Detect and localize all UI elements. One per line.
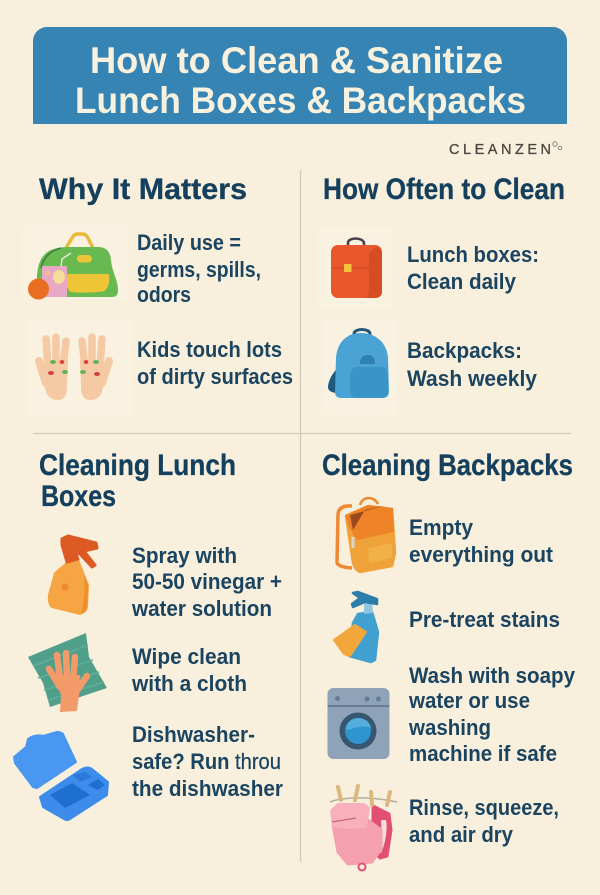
icon: washing machine (328, 688, 390, 759)
icon: blue spray and orange cloth (334, 592, 378, 662)
panel: how often to clean (318, 173, 565, 414)
text: pre-treat: Pre-treat stains (409, 607, 560, 632)
text: backpacks weekly: Wash weekly (407, 366, 538, 391)
text: kids touch (137, 337, 293, 389)
heading: cleaning lunch boxes: Boxes (41, 480, 116, 513)
text: dishwasher: safe? Run throu (132, 749, 281, 774)
title text: How to Clean & Sanitize (90, 40, 503, 81)
heading: how often: How Often to Clean (323, 173, 565, 206)
text: rinse (409, 795, 559, 847)
icon: green lunch bag with juice and orange (22, 226, 128, 300)
brand logo: CLEANZEN (449, 142, 551, 158)
text: wash: water or use (408, 688, 530, 713)
text: rinse: and air dry (409, 822, 514, 847)
text: empty (409, 515, 554, 567)
text: dishwasher: Dishwasher- (132, 722, 255, 747)
text: dishwasher (132, 722, 283, 801)
panel: cleaning lunch boxes (14, 449, 283, 820)
text: backpacks weekly (407, 338, 538, 391)
text: daily use: Daily use = (137, 230, 241, 255)
text: empty: Empty (409, 515, 474, 540)
text: rinse: Rinse, squeeze, (409, 795, 559, 820)
heading: why it matters: Why It Matters (39, 173, 247, 206)
text: daily use: germs, spills, (137, 257, 261, 282)
text: backpacks weekly: Backpacks: (407, 338, 522, 363)
icon: orange open backpack (337, 498, 395, 572)
text: daily use (137, 230, 261, 307)
text: lunch boxes daily: Lunch boxes: (407, 242, 539, 267)
text: wipe (131, 644, 247, 696)
text: empty: everything out (409, 542, 554, 567)
text: kids touch: Kids touch lots (137, 337, 282, 362)
panel: cleaning backpacks (322, 449, 576, 870)
icon: pink backpack drying on line (330, 786, 397, 870)
text: spray (131, 543, 282, 621)
text: lunch boxes daily (407, 242, 539, 294)
text: spray: water solution (131, 596, 272, 621)
text: daily use: odors (137, 282, 191, 307)
panel: why it matters (22, 173, 293, 418)
icon: dirty hands (28, 322, 132, 418)
text: dishwasher: the dishwasher (132, 776, 283, 801)
text: wash (408, 663, 576, 766)
title text (75, 40, 526, 121)
text: spray: Spray with (132, 543, 237, 568)
heading: cleaning lunch boxes: Cleaning Lunch (39, 449, 236, 482)
heading: cleaning lunch boxes (39, 449, 236, 513)
title text: Lunch Boxes & Backpacks (75, 80, 526, 121)
icon: red lunch box bag (318, 227, 392, 307)
icon: hand wiping with cloth (28, 633, 107, 712)
text: wipe: Wipe clean (132, 644, 241, 669)
text: wash: washing (408, 715, 491, 740)
icon: blue lunch box (14, 732, 108, 820)
text: wipe: with a cloth (131, 671, 247, 696)
icon: blue backpack (322, 319, 397, 414)
text: wash: Wash with soapy (409, 663, 576, 688)
text: kids touch: of dirty surfaces (137, 364, 293, 389)
text: lunch boxes daily: Clean daily (407, 269, 517, 294)
icon: orange spray bottle (49, 536, 97, 614)
title banner (33, 27, 567, 124)
text: wash: machine if safe (409, 741, 557, 766)
text: spray: 50-50 vinegar + (132, 569, 282, 594)
